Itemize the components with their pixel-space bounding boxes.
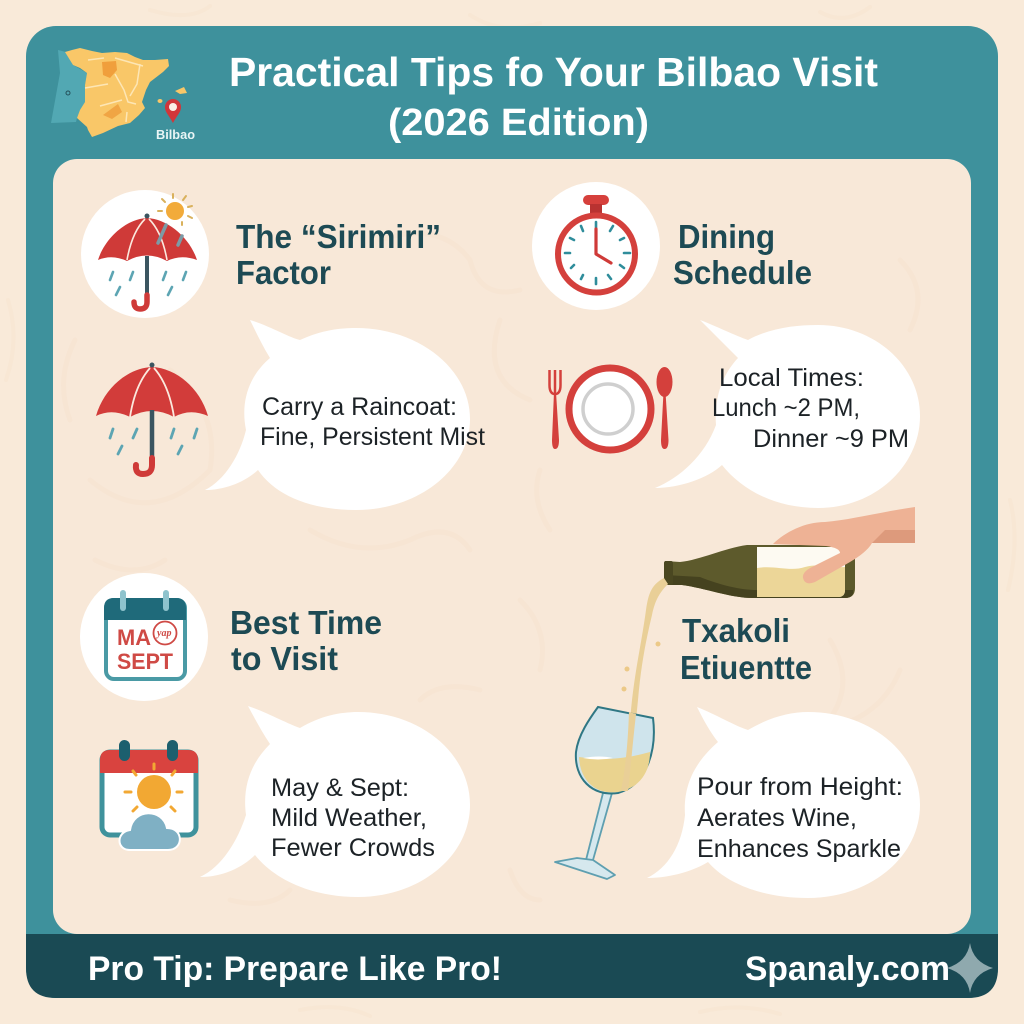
speech bubble: Fewer Crowds (271, 834, 435, 862)
heading: to Visit (231, 640, 338, 677)
icon: umbrella with rain (96, 362, 208, 474)
heading: Best Time (230, 604, 382, 641)
icon: calendar May and Sept: MA (117, 625, 151, 650)
wine stream (619, 578, 668, 790)
title: Practical Tips fo Your Bilbao Visit (229, 49, 878, 95)
heading: Dining (678, 218, 775, 255)
speech bubble: Pour from Height: (697, 773, 903, 801)
speech bubble: Fine, Persistent Mist (260, 423, 485, 451)
heading: The “Sirimiri” (236, 218, 441, 255)
title: (2026 Edition) (388, 102, 649, 144)
map of Spain with Bilbao pin (51, 48, 195, 142)
speech bubble: Lunch ~2 PM, (712, 394, 860, 422)
section: Sirimiri factor (81, 190, 485, 510)
heading: Etiuentte (680, 649, 812, 686)
speech bubble (647, 707, 920, 898)
section: best time to visit (80, 573, 470, 897)
icon: wine glass (555, 707, 654, 879)
heading: Factor (236, 254, 331, 291)
heading (230, 604, 382, 677)
title (229, 49, 878, 144)
heading: Schedule (673, 254, 812, 291)
speech bubble: May & Sept: (271, 774, 409, 802)
speech bubble: Local Times: (719, 364, 864, 392)
heading (673, 218, 812, 291)
heading (680, 612, 812, 686)
icon: calendar with sun and cloud (100, 740, 198, 850)
footer bar (26, 934, 998, 998)
speech bubble (655, 320, 920, 508)
speech bubble: Carry a Raincoat: (262, 393, 457, 421)
heading (236, 218, 441, 291)
speech bubble: Enhances Sparkle (697, 835, 901, 863)
section: dining schedule (532, 182, 920, 508)
speech bubble: Aerates Wine, (697, 804, 857, 832)
icon: umbrella with sun badge (81, 190, 209, 318)
inner cream panel (53, 159, 971, 934)
icon: calendar May and Sept: yap (156, 628, 171, 639)
speech bubble (200, 706, 470, 897)
icon: plate and cutlery (550, 367, 672, 450)
icon: stopwatch (532, 182, 660, 310)
icon: hand pouring bottle (664, 507, 915, 598)
footer site name: Spanaly.com (745, 950, 950, 988)
speech bubble (205, 320, 485, 510)
icon: calendar May and Sept: SEPT (117, 649, 174, 674)
heading: Txakoli (682, 612, 790, 649)
section: txakoli etiquette (555, 507, 920, 898)
speech bubble: Mild Weather, (271, 804, 427, 832)
icon: calendar May and Sept (80, 573, 208, 701)
footer tip text: Pro Tip: Prepare Like Pro! (88, 950, 502, 988)
icon: sparkle (947, 943, 993, 993)
map of Spain with Bilbao pin: Bilbao (156, 127, 195, 142)
speech bubble: Dinner ~9 PM (753, 425, 909, 453)
